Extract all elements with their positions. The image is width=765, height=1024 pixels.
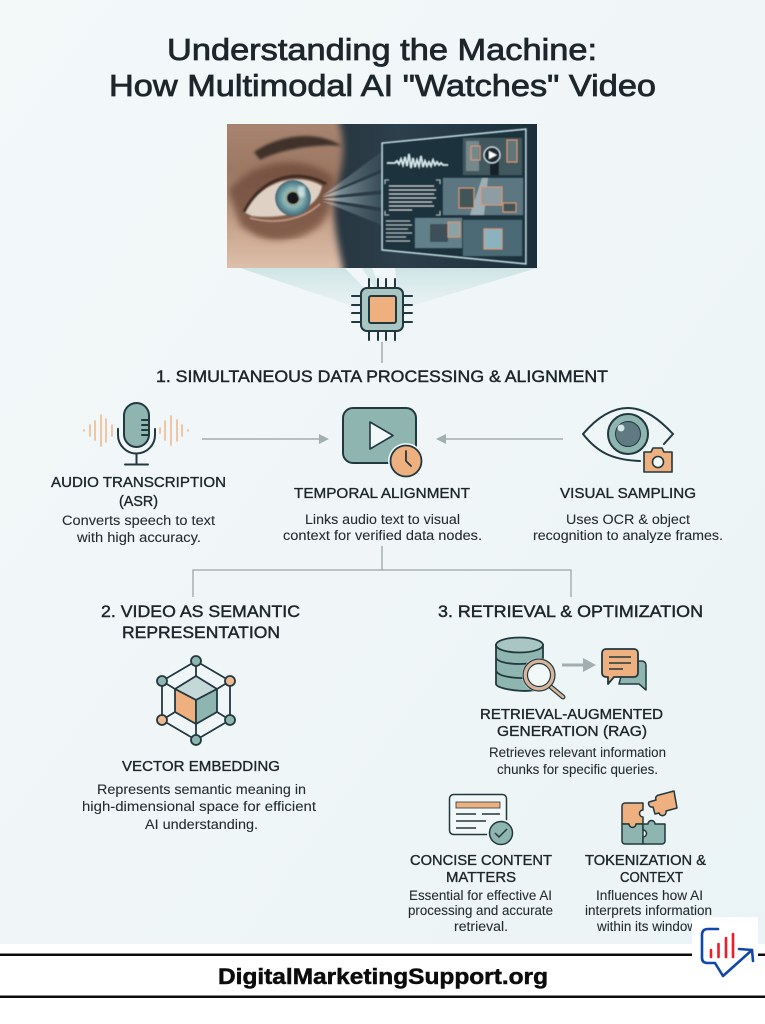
audio transcription text: with high accuracy. <box>76 530 201 545</box>
audio transcription text: AUDIO TRANSCRIPTION <box>51 475 226 491</box>
title: Understanding the Machine: <box>167 32 597 67</box>
footer band <box>0 944 765 1024</box>
section 3 heading: 3. RETRIEVAL & OPTIMIZATION <box>438 602 703 621</box>
title <box>109 32 656 103</box>
tokenization text: interprets information <box>585 903 712 918</box>
logo: chat bubble with chart <box>692 917 758 987</box>
tokenization text: CONTEXT <box>620 870 683 886</box>
temporal alignment text: Links audio text to visual <box>305 512 460 527</box>
vector embedding text: AI understanding. <box>145 817 258 832</box>
icon: vector embedding cube <box>157 656 235 745</box>
temporal alignment text: TEMPORAL ALIGNMENT <box>294 486 470 502</box>
section 2 heading: REPRESENTATION <box>122 623 280 642</box>
icon: eye with camera <box>583 408 673 472</box>
icon: processor chip <box>352 279 412 340</box>
temporal alignment text <box>283 486 482 543</box>
visual sampling text: Uses OCR & object <box>566 512 690 527</box>
section 1 heading: 1. SIMULTANEOUS DATA PROCESSING & ALIGNMENT <box>156 367 608 386</box>
icon: puzzle pieces <box>622 791 677 844</box>
arrow: visual to alignment <box>436 434 563 444</box>
title: How Multimodal AI "Watches" Video <box>109 68 656 103</box>
light fan to chip <box>240 268 537 308</box>
audio transcription text <box>51 475 226 545</box>
icon: microphone with sound waves <box>84 403 188 464</box>
tokenization text: within its window <box>596 919 697 934</box>
icon: database search to chat <box>496 638 646 697</box>
tokenization text: Influences how AI <box>596 888 703 903</box>
vector embedding text: high-dimensional space for efficient <box>82 799 316 814</box>
hero image: eye scanning video frames <box>227 124 537 268</box>
section 2 heading: 2. VIDEO AS SEMANTIC <box>101 602 300 621</box>
rag text: RETRIEVAL-AUGMENTED <box>480 707 663 723</box>
branch connector <box>193 546 571 597</box>
audio transcription text: Converts speech to text <box>62 513 215 528</box>
rag text: GENERATION (RAG) <box>497 724 647 740</box>
tokenization text: TOKENIZATION & <box>585 853 706 869</box>
visual sampling text: recognition to analyze frames. <box>533 528 723 543</box>
visual sampling text <box>533 486 723 543</box>
section 2 heading <box>101 602 300 642</box>
tokenization text <box>585 853 712 934</box>
concise content text: retrieval. <box>454 919 508 934</box>
concise content text: CONCISE CONTENT <box>410 853 552 869</box>
rag text <box>480 707 666 777</box>
icon: video play with clock <box>343 408 424 479</box>
vector embedding text: VECTOR EMBEDDING <box>122 759 280 775</box>
arrow: audio to alignment <box>202 434 329 444</box>
rag text: Retrieves relevant information <box>489 745 666 760</box>
visual sampling text: VISUAL SAMPLING <box>560 486 696 502</box>
concise content text: MATTERS <box>446 870 516 886</box>
vector embedding text <box>82 759 316 832</box>
concise content text <box>408 853 553 934</box>
icon: document with check <box>450 794 515 847</box>
footer band: DigitalMarketingSupport.org <box>218 964 548 989</box>
concise content text: processing and accurate <box>408 903 553 918</box>
concise content text: Essential for effective AI <box>409 888 552 903</box>
rag text: chunks for specific queries. <box>497 762 658 777</box>
temporal alignment text: context for verified data nodes. <box>283 528 482 543</box>
vector embedding text: Represents semantic meaning in <box>97 782 306 797</box>
audio transcription text: (ASR) <box>119 494 158 510</box>
